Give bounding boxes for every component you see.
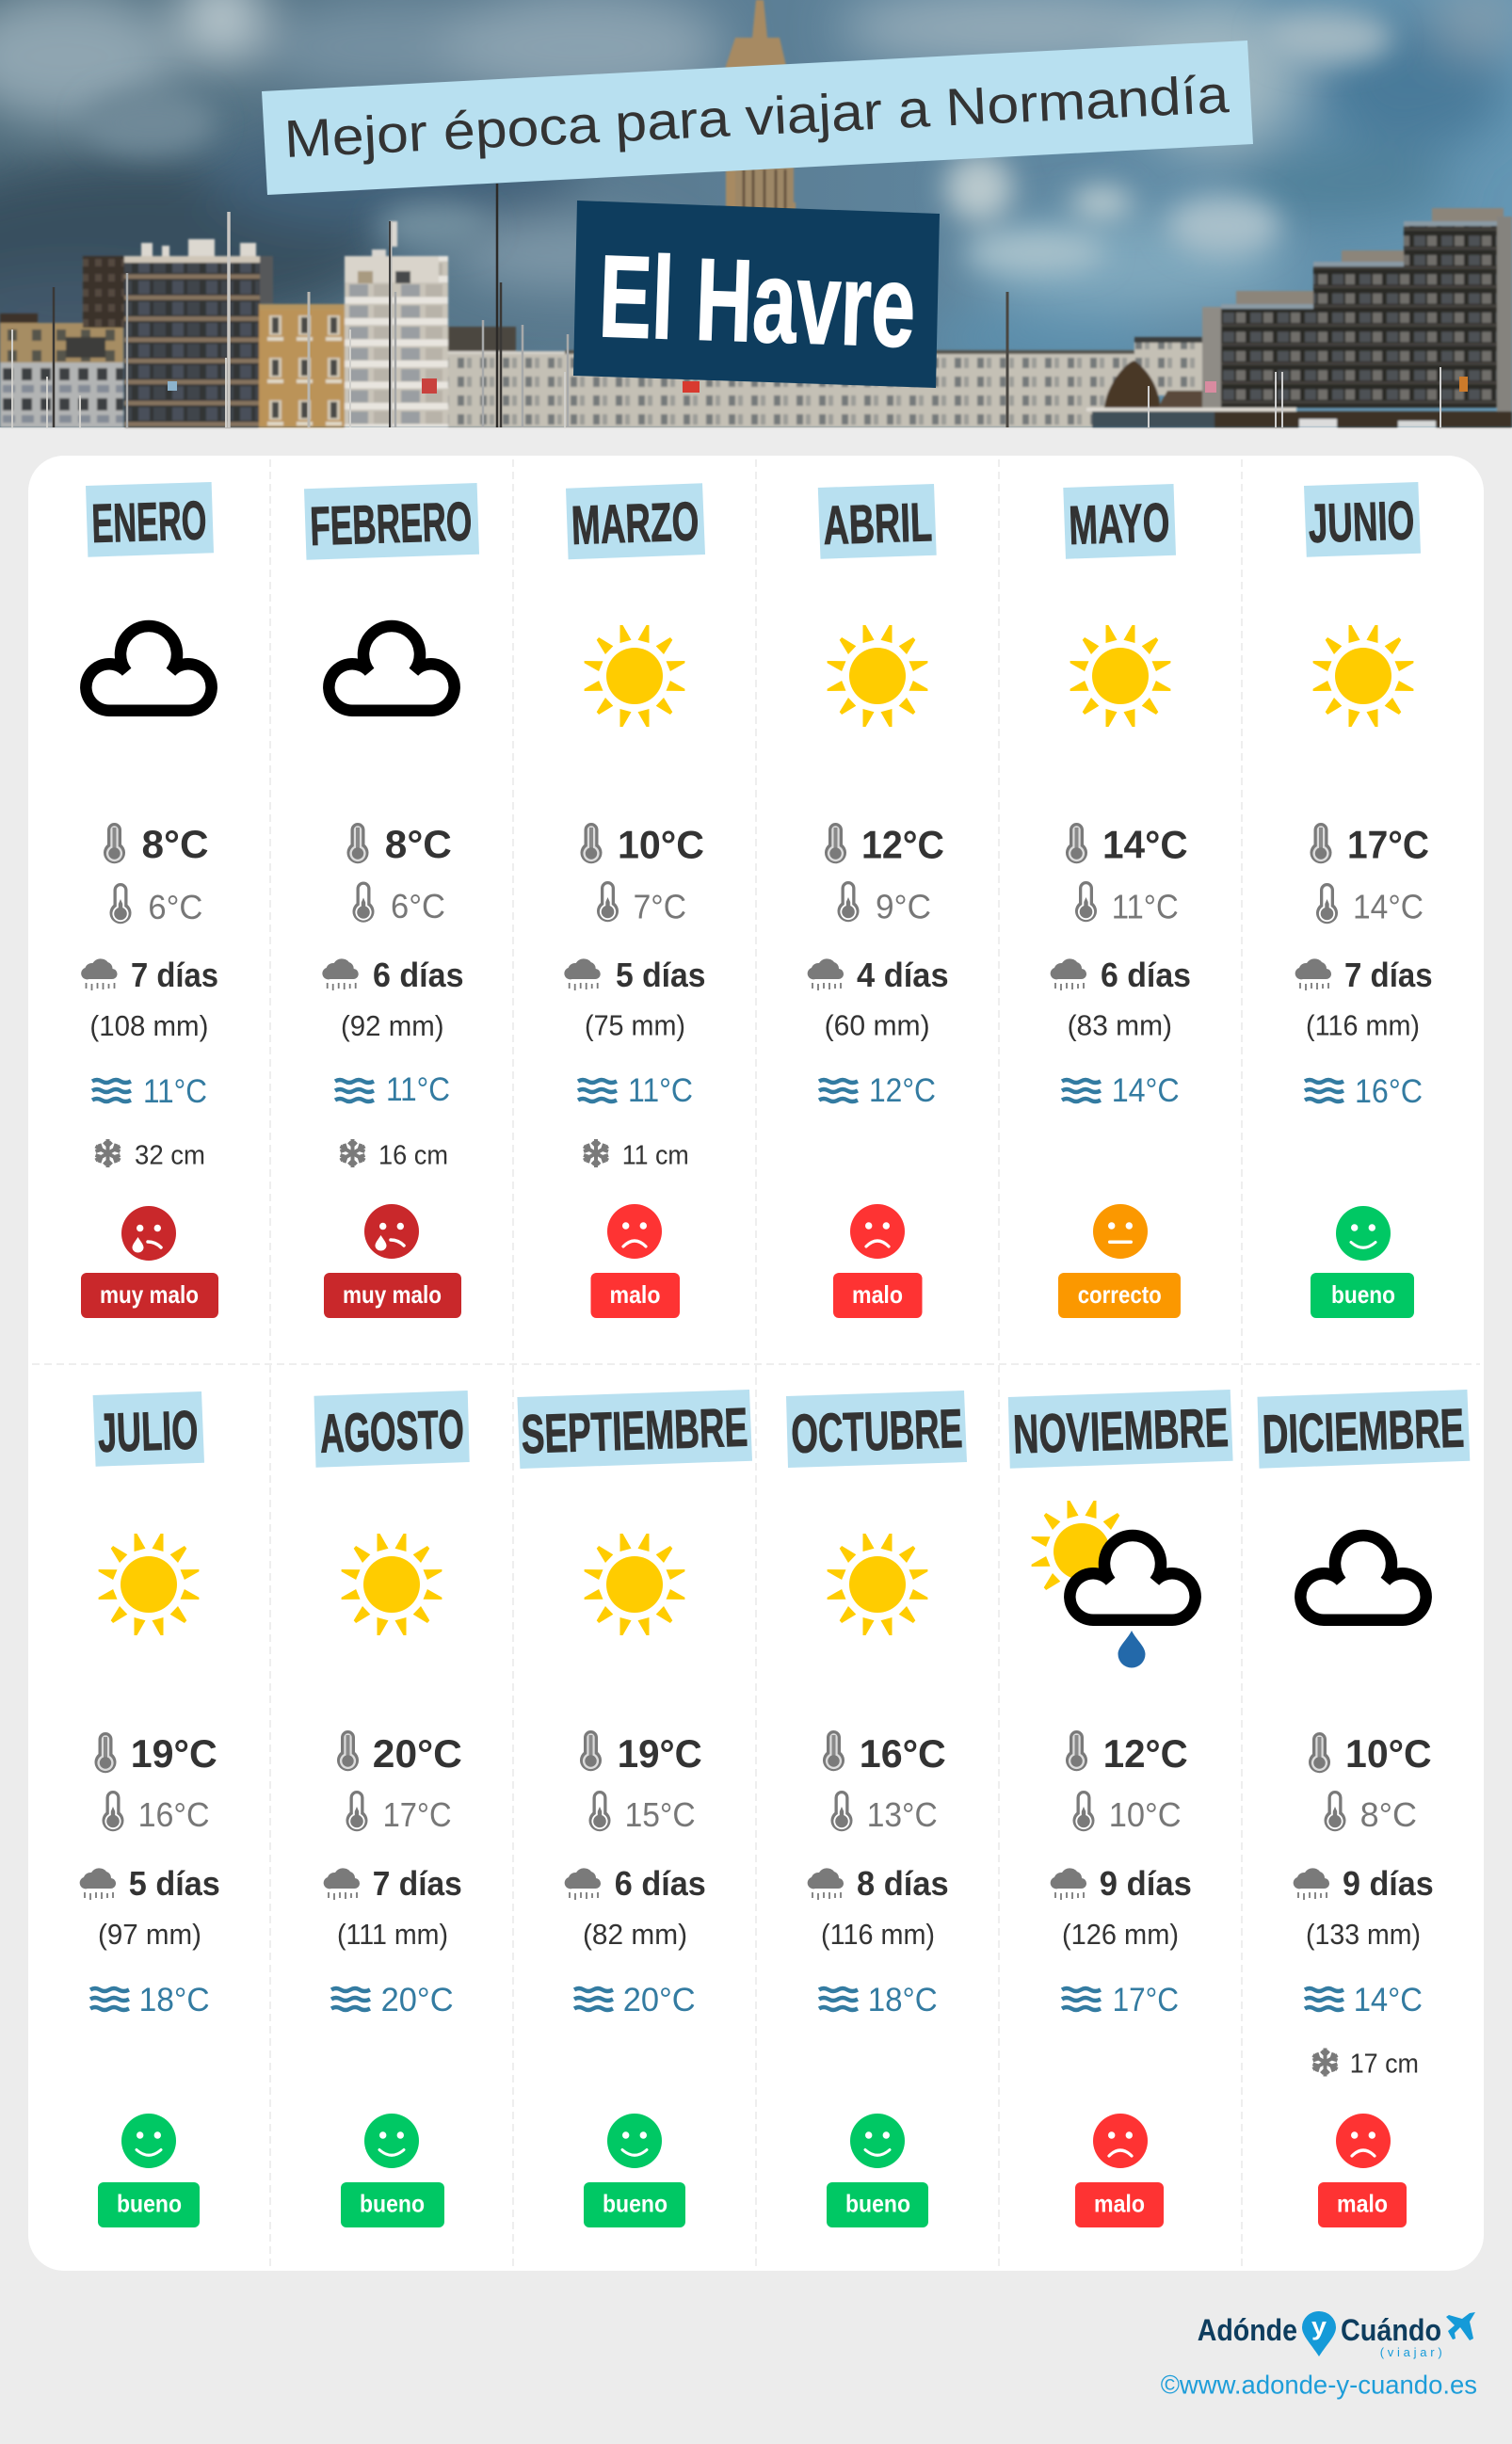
rating badge <box>1318 2182 1407 2227</box>
max temperature <box>94 1731 217 1776</box>
rating badge <box>341 2182 444 2227</box>
month: julio <box>80 1391 220 2227</box>
icon: cloud <box>329 626 455 711</box>
icon: cloud <box>1300 1536 1426 1620</box>
min temperature: 11°C <box>1112 887 1179 926</box>
rainy days: 9 días <box>1343 1864 1434 1903</box>
min temperature <box>1324 1791 1417 1834</box>
rainy days: 6 días <box>1101 956 1191 994</box>
rainy days <box>1294 1864 1434 1903</box>
rating badge: malo <box>610 1280 661 1309</box>
rainy days <box>808 1864 949 1903</box>
max temperature <box>337 1730 462 1776</box>
month label: ENERO <box>90 490 207 555</box>
sea temperature: 16°C <box>1355 1073 1423 1110</box>
month: diciembre <box>1258 1390 1470 2227</box>
sea temperature <box>92 1073 207 1110</box>
rainy days: 6 días <box>373 956 463 994</box>
rainy days: 4 días <box>857 956 949 994</box>
snow: 32 cm <box>135 1141 205 1171</box>
min temperature: 14°C <box>1353 887 1424 926</box>
month label <box>1063 484 1176 559</box>
min temperature: 16°C <box>138 1795 210 1834</box>
snow <box>341 1139 448 1171</box>
rainy days <box>808 956 949 994</box>
max temperature: 10°C <box>618 823 704 866</box>
precipitation: (116 mm) <box>1306 1009 1420 1041</box>
max temperature: 19°C <box>618 1731 702 1776</box>
subtitle banner: Mejor época para viajar a Normandía <box>283 64 1231 169</box>
min temperature: 8°C <box>1360 1795 1417 1834</box>
month: abril <box>808 484 949 1318</box>
rating badge <box>1311 1273 1414 1318</box>
rating badge: bueno <box>117 2190 182 2218</box>
month: octubre <box>786 1391 967 2227</box>
sea temperature <box>1305 1073 1423 1110</box>
rating badge: bueno <box>603 2190 668 2218</box>
rainy days <box>564 956 706 994</box>
masts and flags <box>12 184 1440 427</box>
rating badge <box>81 1273 218 1318</box>
rating badge: muy malo <box>343 1280 442 1309</box>
rating badge: bueno <box>845 2190 910 2218</box>
rating face <box>121 2114 176 2168</box>
rainy days: 7 días <box>1344 956 1433 994</box>
rainy days <box>565 1864 706 1903</box>
rainy days <box>1051 1864 1192 1903</box>
rating face <box>607 2114 662 2168</box>
rating face <box>1093 2114 1148 2168</box>
rating face <box>1336 1206 1391 1261</box>
min temperature: 7°C <box>634 887 686 926</box>
min temperature: 9°C <box>876 887 931 926</box>
sea temperature <box>1062 1982 1179 2018</box>
rating face <box>121 1206 176 1261</box>
sea temperature: 11°C <box>143 1073 207 1110</box>
month label: SEPTIEMBRE <box>521 1397 748 1465</box>
rating badge <box>98 2182 200 2227</box>
sea temperature: 20°C <box>381 1982 454 2018</box>
month: septiembre <box>517 1390 752 2227</box>
precipitation: (97 mm) <box>98 1918 201 1951</box>
logo: Adónde y Cuándo <box>1198 2311 1475 2359</box>
month: mayo <box>1051 484 1191 1318</box>
sea temperature: 17°C <box>1113 1982 1179 2018</box>
month: agosto <box>314 1391 470 2227</box>
rating badge: malo <box>852 1280 903 1309</box>
icon: sun <box>585 625 684 727</box>
month label <box>314 1391 470 1468</box>
icon: sun <box>1313 625 1413 727</box>
sea temperature: 20°C <box>623 1982 696 2018</box>
sea temperature <box>574 1982 696 2018</box>
month: junio <box>1295 482 1433 1318</box>
max temperature: 8°C <box>385 822 452 866</box>
month: noviembre <box>1008 1390 1233 2227</box>
title banner: El Havre <box>573 201 940 388</box>
snow <box>1312 2049 1419 2079</box>
logo: Adónde y Cuándo: Adónde <box>1198 2313 1297 2347</box>
month label: OCTUBRE <box>790 1398 963 1465</box>
sea temperature: 11°C <box>386 1071 450 1108</box>
rating face <box>850 2114 905 2168</box>
rainy days <box>324 1864 462 1903</box>
rainy days: 9 días <box>1100 1864 1192 1903</box>
rating badge <box>584 2182 685 2227</box>
month label <box>517 1390 752 1469</box>
month label: AGOSTO <box>319 1399 465 1465</box>
rainy days <box>1295 956 1433 994</box>
rating badge: malo <box>1094 2190 1145 2218</box>
title banner: El Havre: El Havre <box>597 232 917 372</box>
precipitation: (108 mm) <box>89 1009 208 1042</box>
rainy days: 7 días <box>373 1864 462 1903</box>
snow: 11 cm <box>622 1141 689 1171</box>
icon: sun <box>585 1534 684 1635</box>
max temperature: 12°C <box>1103 1731 1188 1776</box>
max temperature: 17°C <box>1347 823 1429 866</box>
icon: sun <box>828 625 927 727</box>
icon: sun <box>99 1534 199 1635</box>
month label <box>1304 482 1421 557</box>
month label <box>818 484 937 559</box>
sea temperature: 11°C <box>628 1072 693 1109</box>
rating face <box>1336 2114 1391 2168</box>
logo: Adónde y Cuándo: y <box>1311 2312 1327 2340</box>
max temperature: 8°C <box>141 822 209 866</box>
precipitation: (60 mm) <box>825 1009 930 1041</box>
min temperature <box>1073 1791 1182 1834</box>
min temperature <box>346 1791 452 1834</box>
rating badge <box>324 1273 461 1318</box>
min temperature: 17°C <box>383 1795 452 1834</box>
max temperature: 19°C <box>131 1731 217 1776</box>
precipitation: (82 mm) <box>583 1918 687 1951</box>
max temperature <box>580 823 704 866</box>
month label <box>786 1391 967 1468</box>
max temperature: 10°C <box>1345 1731 1432 1776</box>
sea temperature <box>335 1071 450 1108</box>
buildings <box>0 208 1512 427</box>
rating badge: bueno <box>360 2190 425 2218</box>
precipitation: (111 mm) <box>337 1918 448 1951</box>
sea temperature: 12°C <box>869 1072 936 1109</box>
rating badge: bueno <box>1331 1280 1395 1309</box>
rainy days: 6 días <box>615 1864 706 1903</box>
min temperature <box>352 881 445 925</box>
icon: sun <box>342 1534 442 1635</box>
min temperature <box>1316 883 1424 926</box>
max temperature <box>346 822 452 866</box>
icon: sun <box>1070 625 1170 727</box>
logo: Adónde y Cuándo: (viajar) <box>1380 2345 1442 2359</box>
rainy days <box>1051 956 1191 994</box>
sea temperature: 14°C <box>1354 1982 1423 2018</box>
month label <box>1008 1390 1233 1469</box>
rating badge <box>827 2182 928 2227</box>
month: enero <box>81 482 218 1318</box>
rainy days: 7 días <box>131 956 218 994</box>
month label: MAYO <box>1068 491 1170 556</box>
max temperature <box>1066 823 1188 866</box>
max temperature: 20°C <box>373 1731 462 1776</box>
tower <box>726 0 796 212</box>
max temperature <box>825 823 944 866</box>
month label: NOVIEMBRE <box>1012 1397 1230 1465</box>
snow <box>584 1139 689 1171</box>
min temperature <box>102 1791 210 1834</box>
sea temperature <box>819 1072 936 1109</box>
rainy days <box>81 956 218 994</box>
sea temperature: 18°C <box>868 1982 938 2018</box>
rating face <box>364 2114 419 2168</box>
precipitation: (116 mm) <box>821 1918 935 1951</box>
panel: months card <box>28 456 1484 2271</box>
snow: 16 cm <box>378 1141 448 1171</box>
min temperature <box>838 881 931 926</box>
sea temperature <box>331 1982 454 2018</box>
max temperature <box>823 1730 946 1776</box>
month label <box>86 482 214 557</box>
sea temperature <box>1062 1072 1180 1109</box>
min temperature: 6°C <box>148 888 202 926</box>
precipitation: (83 mm) <box>1068 1009 1172 1041</box>
rating face <box>364 1204 419 1259</box>
rating badge <box>1075 2182 1164 2227</box>
rainy days: 5 días <box>616 956 706 994</box>
rating badge <box>1058 1273 1181 1318</box>
rating badge: muy malo <box>100 1280 199 1309</box>
max temperature: 12°C <box>861 823 944 866</box>
sea temperature: 18°C <box>139 1982 210 2018</box>
rating badge: malo <box>1337 2190 1388 2218</box>
max temperature <box>580 1730 702 1776</box>
month label: ABRIL <box>822 491 933 556</box>
month label <box>304 483 479 560</box>
max temperature: 16°C <box>860 1731 946 1776</box>
precipitation: (133 mm) <box>1306 1918 1421 1951</box>
min temperature <box>597 881 686 926</box>
min temperature: 13°C <box>867 1795 938 1834</box>
icon: sun behind cloud with rain drop <box>1032 1501 1196 1668</box>
min temperature: 6°C <box>391 887 445 925</box>
precipitation: (92 mm) <box>341 1009 444 1042</box>
min temperature <box>830 1791 938 1834</box>
snow: 17 cm <box>1350 2049 1419 2079</box>
min temperature <box>589 1791 696 1834</box>
rainy days <box>322 956 463 994</box>
rating badge: correcto <box>1078 1280 1162 1309</box>
sea temperature <box>819 1982 938 2018</box>
subtitle banner <box>262 40 1253 195</box>
icon: sun <box>828 1534 927 1635</box>
min temperature: 10°C <box>1109 1795 1182 1834</box>
month: febrero <box>304 483 479 1318</box>
header photo: Le Havre seafront under cloudy sky <box>0 0 1512 427</box>
month label <box>566 483 705 559</box>
sea temperature <box>1305 1982 1423 2018</box>
max temperature <box>1311 823 1429 866</box>
month label: JULIO <box>97 1400 199 1464</box>
max temperature: 14°C <box>1102 823 1188 866</box>
min temperature: 15°C <box>625 1795 696 1834</box>
min temperature <box>1075 881 1179 926</box>
month label <box>93 1391 204 1467</box>
snow <box>96 1139 205 1171</box>
icon: cloud <box>86 626 212 711</box>
month label: MARZO <box>571 490 700 556</box>
month label: FEBRERO <box>309 490 473 557</box>
precipitation: (75 mm) <box>585 1009 685 1041</box>
min temperature <box>109 883 202 926</box>
rainy days: 8 días <box>857 1864 949 1903</box>
month label: JUNIO <box>1308 490 1415 555</box>
logo: Adónde y Cuándo: Cuándo <box>1341 2313 1441 2347</box>
rating face <box>850 1204 905 1259</box>
sea temperature: 14°C <box>1112 1072 1180 1109</box>
precipitation: (126 mm) <box>1062 1918 1179 1951</box>
sea temperature <box>90 1982 210 2018</box>
sea temperature <box>578 1072 693 1109</box>
website credit: ©www.adonde-y-cuando.es <box>1161 2371 1477 2400</box>
rainy days: 5 días <box>129 1864 220 1903</box>
max temperature <box>1066 1730 1188 1776</box>
rating badge <box>591 1273 680 1318</box>
max temperature <box>104 822 209 866</box>
rating face <box>1093 1204 1148 1259</box>
rating face <box>607 1204 662 1259</box>
rating badge <box>833 1273 923 1318</box>
month: marzo <box>564 483 706 1318</box>
max temperature <box>1309 1731 1432 1776</box>
rainy days <box>80 1864 220 1903</box>
